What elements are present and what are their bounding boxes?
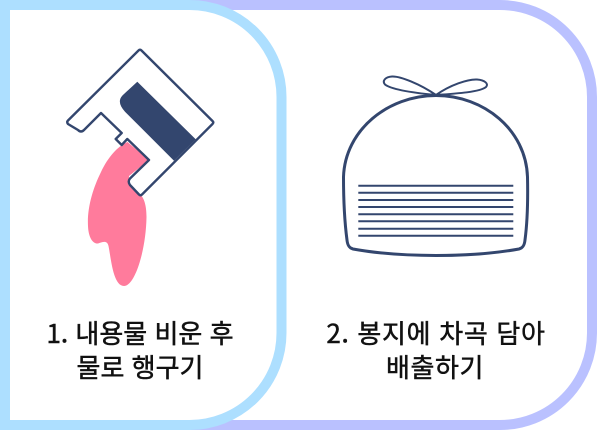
- heading: step 2: 2. 봉지에 차곡 담아: [326, 314, 546, 351]
- panel: step 1: [5, 5, 282, 425]
- heading: step 2 second line: 배출하기: [386, 348, 484, 385]
- heading: step 1: 1. 내용물 비운 후: [46, 314, 234, 351]
- poured pink liquid: [88, 142, 149, 286]
- icon: pouring container: [67, 50, 213, 286]
- icon: tied garbage bag: [344, 76, 528, 256]
- container outline: [67, 50, 213, 195]
- container dark label: [120, 82, 196, 161]
- heading: step 1 second line: 물로 행구기: [77, 348, 203, 385]
- bag contents lines: [358, 186, 513, 236]
